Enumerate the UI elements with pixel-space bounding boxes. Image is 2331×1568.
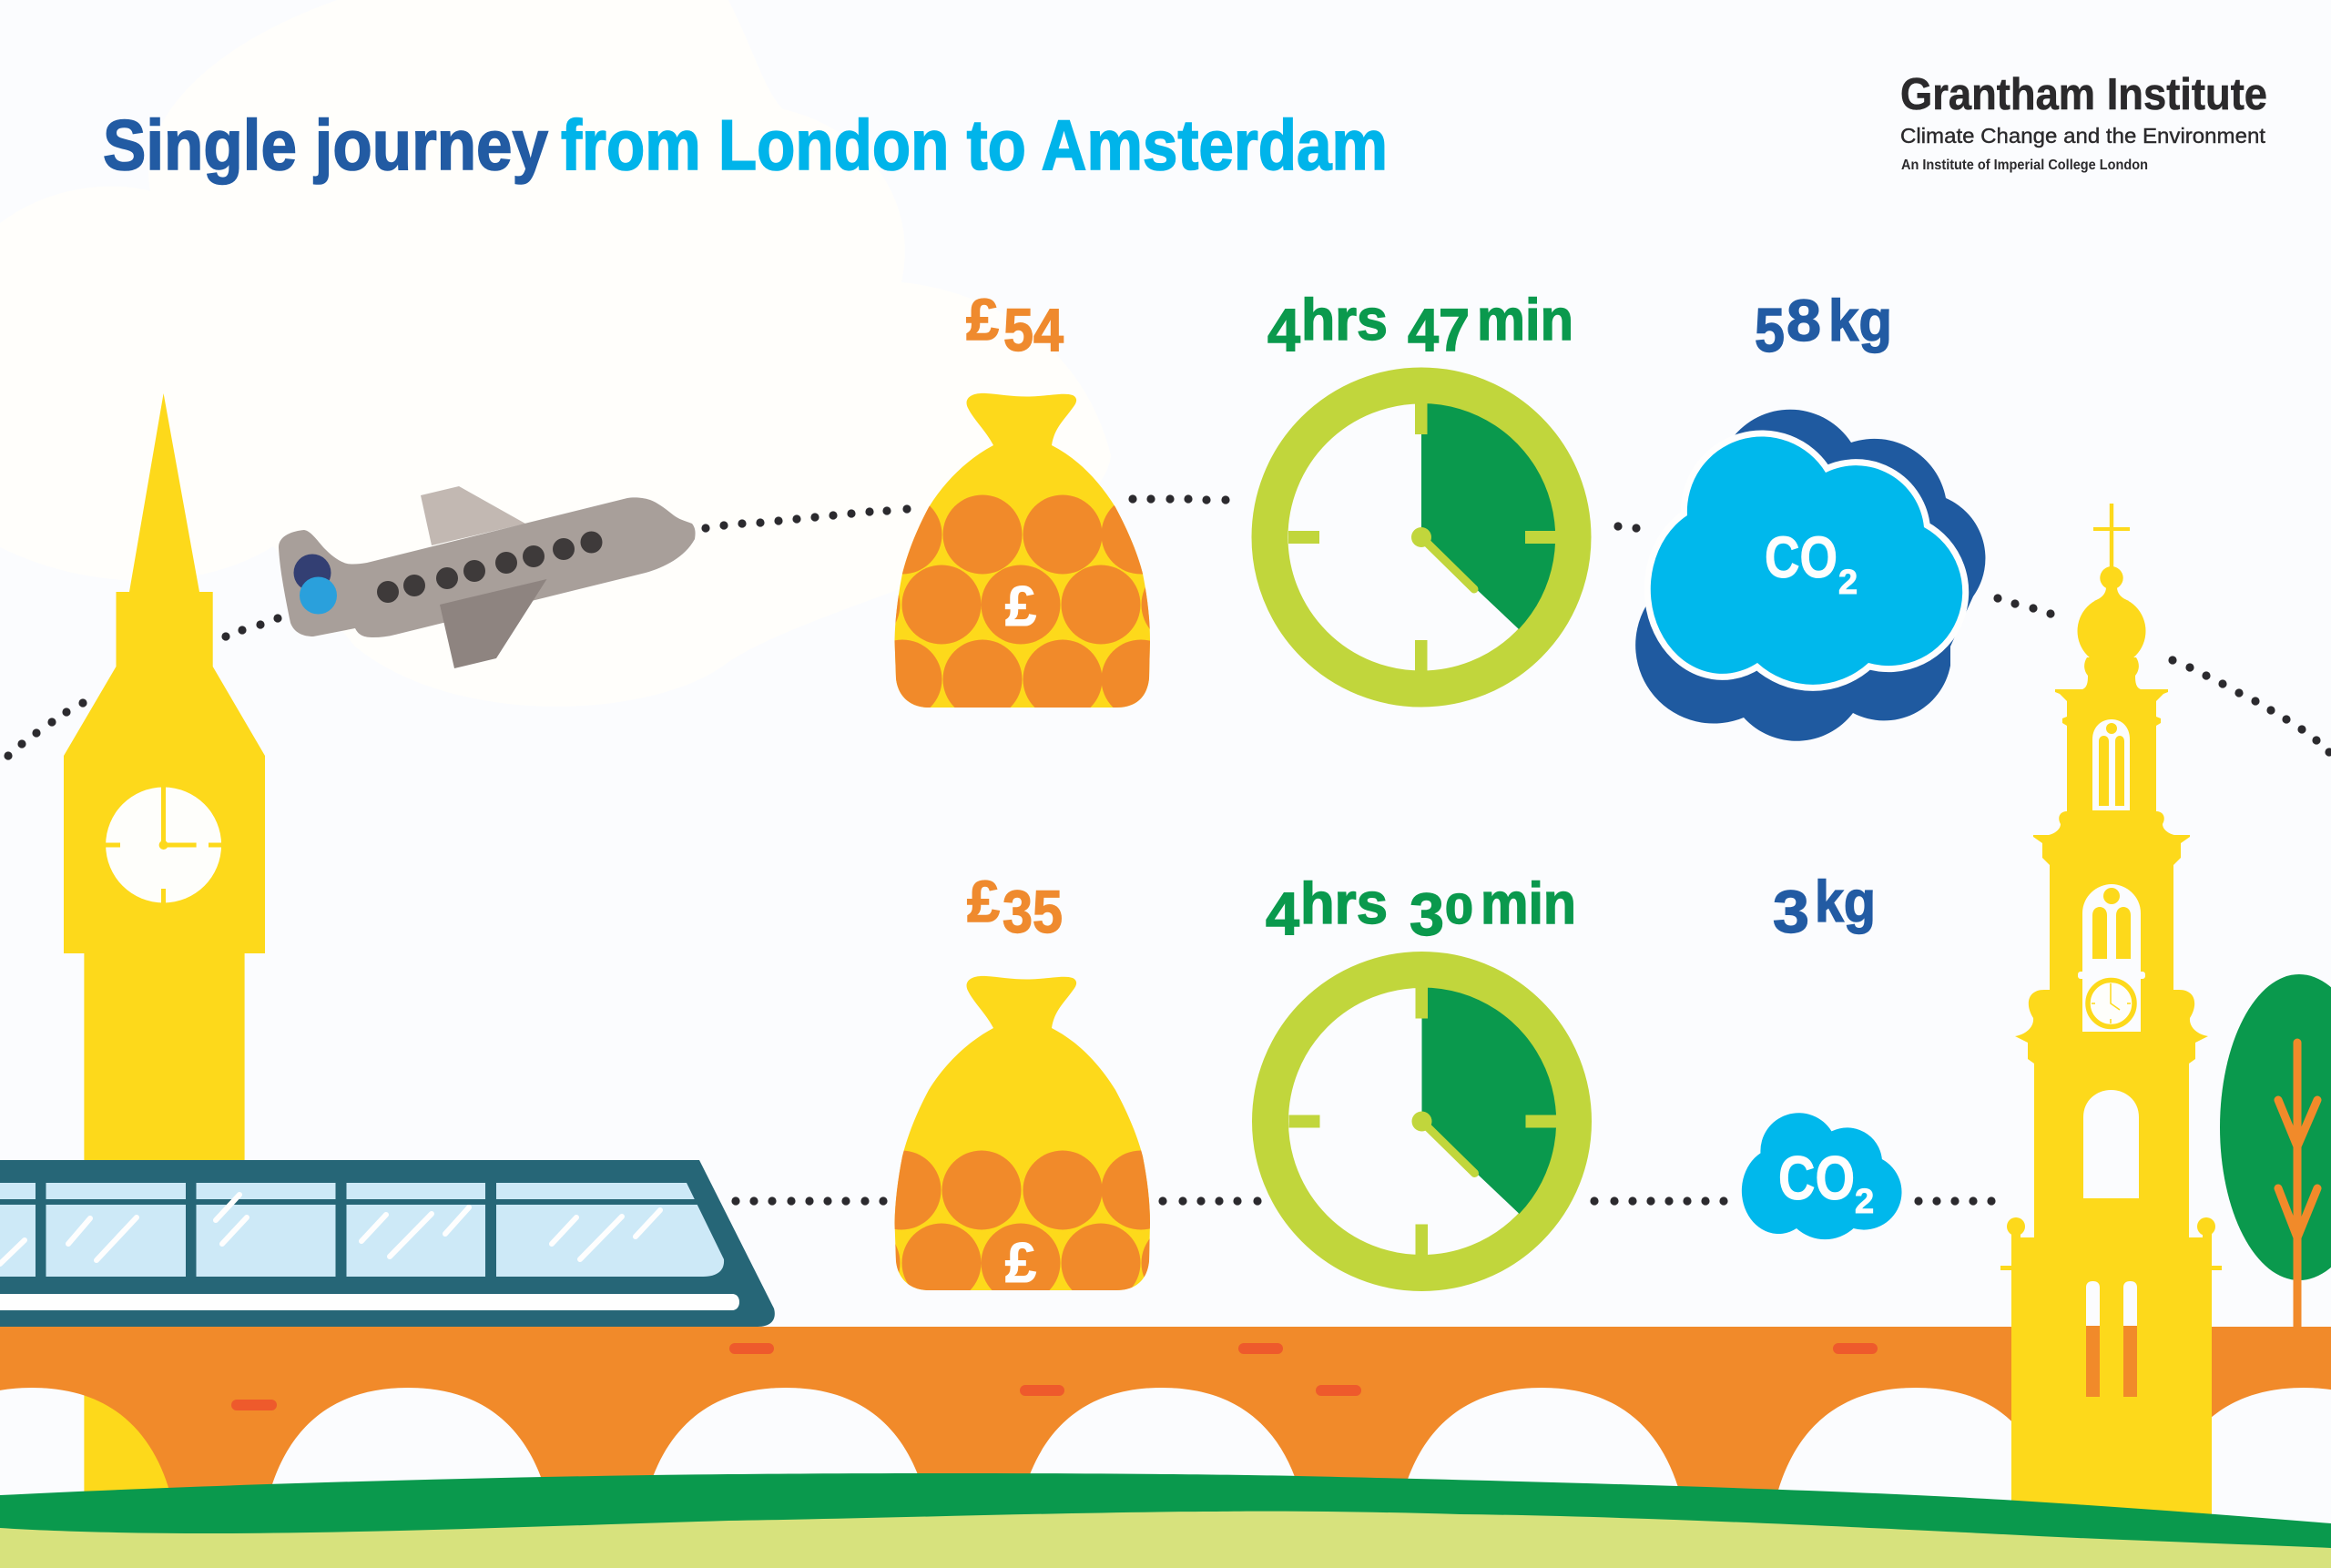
time label: plane: 4: [1267, 296, 1300, 363]
bridge: [0, 1327, 2331, 1530]
CO2 label: plane: kg: [1828, 288, 1892, 353]
title: [103, 105, 1388, 185]
icon: Amsterdam tower: [2000, 504, 2222, 1516]
icon: small CO2 cloud: [1742, 1113, 1902, 1239]
time label: train: 3: [1410, 881, 1444, 948]
time label: train: hrs: [1300, 871, 1388, 936]
CO2 text: 2: [1855, 1183, 1874, 1221]
CO2 label: plane: 8: [1786, 288, 1821, 353]
time label: plane: [1267, 287, 1573, 363]
plane upper wing: [421, 486, 525, 545]
tower upper window: [2092, 719, 2130, 810]
clock ticks and hand: [1288, 403, 1556, 671]
icon: large CO2 cloud: [1635, 410, 1985, 741]
bridge bricks: [231, 1343, 1878, 1410]
time label: plane: min: [1477, 287, 1573, 352]
clock ticks and hand: [1289, 987, 1557, 1255]
dotted route: plane journey: [4, 494, 2331, 760]
icon: money bag (plane): [894, 393, 1150, 708]
icon: Big Ben tower: [64, 393, 265, 1548]
time label: train: [1266, 871, 1576, 948]
tower slots: [2086, 1281, 2137, 1397]
logo: Grantham Institute: An Institute of Imperial College London: [1901, 158, 2148, 173]
ground: light green: [0, 1493, 2331, 1568]
background cloud: [0, 0, 1111, 707]
time label: plane: hrs: [1301, 287, 1388, 352]
plane windows: [377, 532, 603, 603]
cost label: plane: [966, 287, 1064, 363]
tower clock: [2088, 980, 2134, 1027]
logo: Grantham Institute: Grantham Institute: [1900, 70, 2267, 119]
logo: Grantham Institute: [1900, 70, 2267, 173]
cost label: train: £: [967, 869, 1000, 934]
title: from London to Amsterdam: [561, 105, 1388, 185]
clock time wedge: [1421, 403, 1555, 629]
tower clock window: [2078, 884, 2145, 1032]
tower arched opening: [2083, 1090, 2139, 1198]
icon: money bag (train): [894, 976, 1150, 1290]
CO2 text: CO: [1778, 1144, 1855, 1213]
plane tail circles: [293, 554, 337, 614]
time label: train: 4: [1266, 880, 1299, 947]
pound sign: £: [1005, 575, 1036, 638]
plane lower wing: [440, 579, 546, 668]
train window glints: [0, 1195, 660, 1264]
time label: train: min: [1481, 871, 1576, 936]
CO2 label: train: 3: [1773, 878, 1809, 945]
icon: clock (plane): [1269, 386, 1573, 688]
icon: tree: [2220, 974, 2331, 1327]
title: Single journey: [103, 105, 548, 185]
logo: Grantham Institute: Climate Change and the Environment: [1900, 124, 2266, 148]
icon: train: [0, 1160, 775, 1327]
CO2 label: train: kg: [1815, 869, 1876, 934]
cost label: train: 35: [1003, 878, 1063, 945]
time label: plane: 47: [1408, 296, 1470, 363]
bag coins: [894, 1151, 1150, 1290]
CO2 label: plane: 5: [1755, 296, 1785, 365]
ground: dark green hill: [0, 1473, 2331, 1548]
bag coins: [894, 495, 1150, 708]
cost label: plane: 54: [1003, 296, 1064, 363]
plane fuselage: [279, 497, 696, 637]
icon: Big Ben clock face: [106, 787, 223, 903]
cost label: train: [967, 869, 1063, 945]
icon: plane: [279, 486, 696, 668]
tree trunk: [2278, 1043, 2317, 1327]
CO2 text: 2: [1838, 564, 1858, 602]
dotted route: train journey: [731, 1196, 1996, 1206]
CO2 label: train: [1773, 869, 1876, 945]
time label: train: 0: [1445, 885, 1473, 932]
CO2 label: plane: [1755, 288, 1892, 365]
train windows: [0, 1183, 724, 1277]
train stripe: [0, 1294, 739, 1310]
pound sign: £: [1005, 1232, 1036, 1295]
cloud front: [1651, 437, 1962, 685]
CO2 text: CO: [1765, 524, 1837, 590]
clock time wedge: [1422, 987, 1556, 1214]
cost label: plane: £: [966, 287, 999, 352]
icon: clock (train): [1270, 970, 1573, 1273]
